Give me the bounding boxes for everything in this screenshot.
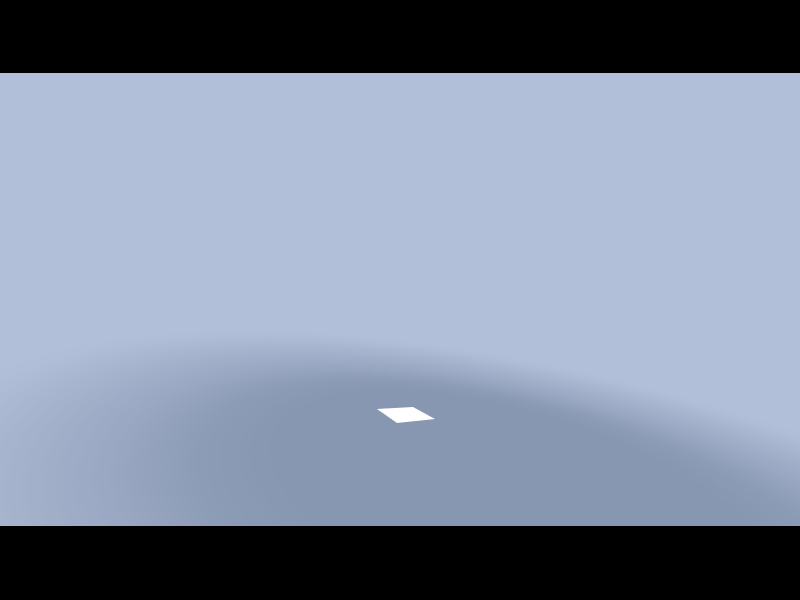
panel: sky backdrop <box>0 73 800 526</box>
scene: letterboxed image <box>0 73 800 526</box>
soft ground shadow <box>0 346 800 526</box>
white parallelogram <box>377 407 435 423</box>
